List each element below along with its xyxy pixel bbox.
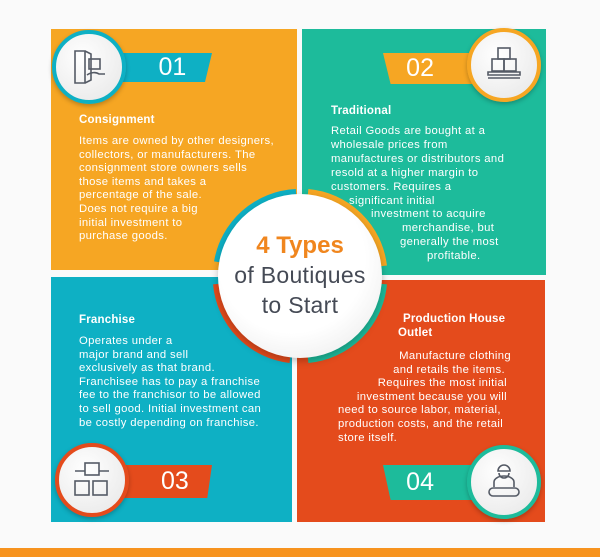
tab 02 [383, 53, 478, 84]
text: consignment: Items are owned by other designers, [79, 135, 274, 147]
text: franchise: be costly depending on franchise. [79, 417, 259, 429]
text: traditional: customers. Requires a [331, 181, 451, 193]
text: production house: need to source labor, material, [338, 404, 501, 416]
text: consignment: purchase goods. [79, 230, 168, 242]
text: consignment: consignment store owners sells [79, 162, 247, 174]
text: traditional: merchandise, but [402, 222, 494, 234]
heading: consignment: Consignment [79, 114, 155, 126]
footer bar [0, 548, 600, 557]
badge 01 [50, 30, 212, 108]
text: consignment: collectors, or manufacturers. The [79, 149, 255, 161]
heading: production house [398, 313, 505, 338]
text: consignment: Does not require a big [79, 203, 198, 215]
icon: door with box [52, 30, 126, 104]
text: production house: and retails the items. [393, 364, 505, 376]
heading: production house: Production House [403, 313, 505, 325]
center title: of Boutiques [234, 262, 366, 288]
text: production house [338, 350, 511, 444]
tab 02: 02 [406, 54, 434, 82]
badge 03 [53, 443, 212, 521]
text: traditional: investment to acquire [371, 208, 486, 220]
text: consignment: initial investment to [79, 217, 182, 229]
icon: stores [55, 443, 129, 517]
tab 01: 01 [158, 53, 186, 81]
badge 02 [383, 28, 543, 106]
text: production house: Requires the most initial [378, 377, 507, 389]
text: traditional: resold at a higher margin to [331, 167, 478, 179]
center title: to Start [262, 292, 338, 318]
center title: 4 Types [256, 232, 344, 259]
panel: consignment [51, 29, 297, 270]
panel: franchise [51, 277, 292, 522]
tab 04 [383, 465, 478, 500]
text: traditional: Retail Goods are bought at a [331, 125, 485, 137]
icon: boxes on pallet [467, 28, 541, 102]
text: traditional: manufactures or distributors and [331, 153, 504, 165]
text: franchise: Operates under a [79, 335, 173, 347]
text: traditional: generally the most [400, 236, 499, 248]
panel: traditional [302, 29, 546, 275]
text: franchise: exclusively as that brand. [79, 362, 215, 374]
text: franchise: major brand and sell [79, 349, 188, 361]
center title [213, 189, 387, 365]
text: production house: investment because you will [357, 391, 507, 403]
text: franchise: fee to the franchisor to be allowed [79, 389, 261, 401]
text: traditional: significant initial [349, 195, 435, 207]
heading: production house: Outlet [398, 326, 432, 338]
text: consignment [79, 135, 274, 242]
icon: worker on conveyor [467, 445, 541, 519]
heading: traditional: Traditional [331, 105, 391, 117]
text: consignment: those items and takes a [79, 176, 206, 188]
text: franchise: to sell good. Initial investment can [79, 403, 261, 415]
text: franchise: Franchisee has to pay a franchise [79, 376, 260, 388]
panel: production house [297, 280, 545, 522]
text: consignment: percentage of the sale. [79, 189, 202, 201]
text: production house: production costs, and the retail [338, 418, 503, 430]
heading: franchise: Franchise [79, 314, 135, 326]
badge 04 [383, 444, 544, 524]
text: franchise [79, 335, 261, 429]
text: production house: Manufacture clothing [399, 350, 511, 362]
text: traditional [331, 125, 504, 262]
tab 01 [122, 53, 212, 82]
text: traditional: wholesale prices from [331, 139, 448, 151]
text: traditional: profitable. [427, 250, 480, 262]
text: production house: store itself. [338, 432, 397, 444]
tab 03 [117, 465, 212, 498]
tab 04: 04 [406, 468, 434, 496]
tab 03: 03 [161, 467, 189, 495]
